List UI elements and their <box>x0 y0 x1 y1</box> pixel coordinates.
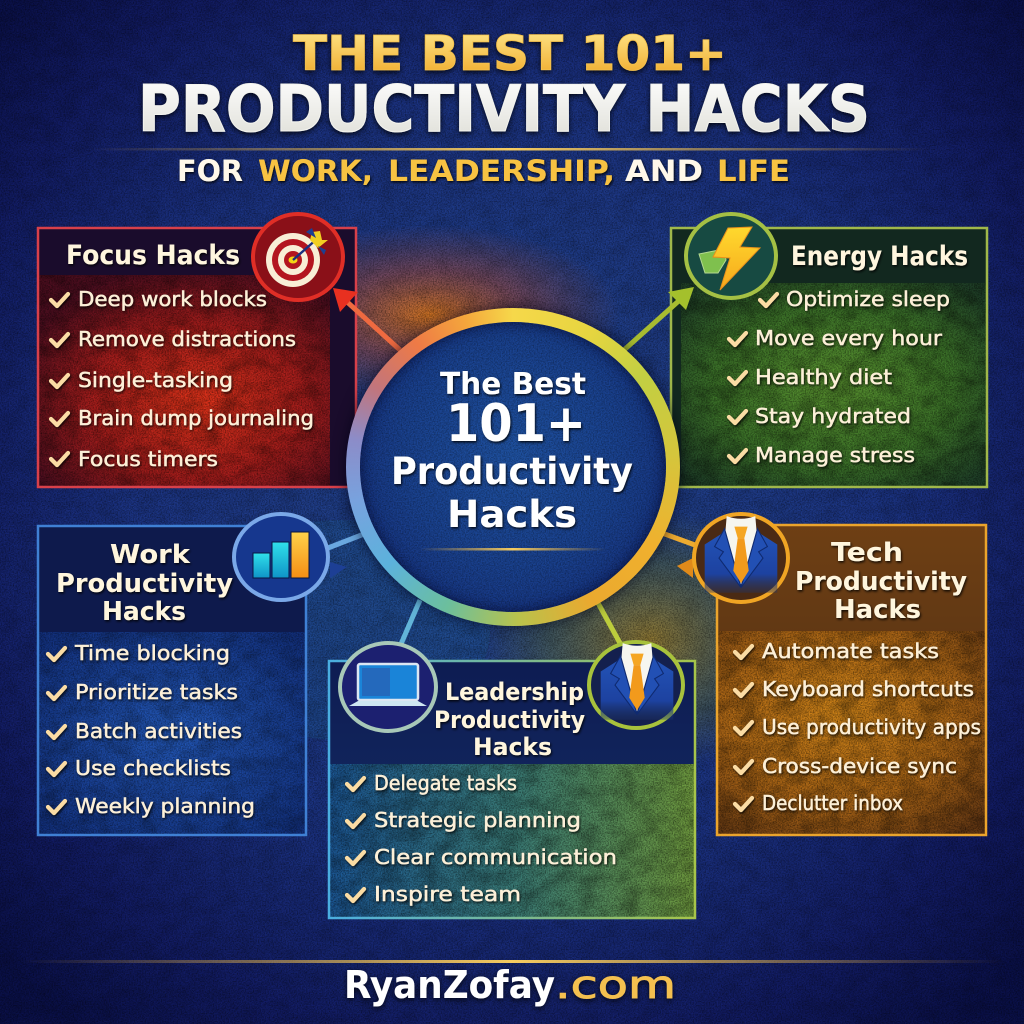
checklist: work: Weekly planning <box>75 794 255 818</box>
checklist: focus: Focus timers <box>78 447 218 471</box>
hub text <box>360 322 666 612</box>
heading: tech productivity hacks: Productivity <box>795 567 967 597</box>
footer url: .com <box>555 963 676 1007</box>
title line 1: THE BEST 101+ <box>293 26 727 82</box>
checklist: tech <box>735 639 981 815</box>
checklist: tech: Declutter inbox <box>762 791 903 815</box>
checklist: focus: Brain dump journaling <box>78 406 314 430</box>
checklist: energy: Healthy diet <box>755 365 892 389</box>
footer <box>20 960 1004 1007</box>
checklist: tech: Automate tasks <box>762 639 939 663</box>
heading: work productivity hacks: Hacks <box>102 597 186 627</box>
checklist: work: Batch activities <box>75 719 242 743</box>
checklist: energy: Optimize sleep <box>786 287 950 311</box>
connector: hub to leadership right <box>598 603 621 645</box>
heading: leadership productivity hacks <box>434 678 585 761</box>
checklist: work: Time blocking <box>74 641 230 665</box>
connector: hub to tech <box>662 533 695 578</box>
checklist: work: Use checklists <box>75 756 231 780</box>
panel: leadership productivity hacks <box>329 661 695 918</box>
arrow: hub to focus <box>333 288 400 350</box>
checklist: focus: Deep work blocks <box>78 287 267 311</box>
panel: work productivity hacks <box>38 526 306 835</box>
footer url: RyanZofay <box>344 963 555 1007</box>
title line 2: PRODUCTIVITY HACKS <box>138 73 870 147</box>
icon: laptop <box>340 643 436 731</box>
heading: leadership productivity hacks: Hacks <box>473 733 552 761</box>
subtitle: FOR <box>177 154 243 188</box>
hub text: Productivity <box>391 450 633 493</box>
title <box>90 26 930 188</box>
heading: work productivity hacks: Productivity <box>56 569 233 599</box>
icon: energy bolt <box>686 214 776 298</box>
checklist: work <box>48 641 255 818</box>
checklist: focus: Single-tasking <box>78 368 233 392</box>
icon: suit (leadership) <box>589 642 683 728</box>
checklist: focus <box>51 287 314 471</box>
heading: tech productivity hacks: Hacks <box>834 595 921 625</box>
subtitle: LEADERSHIP, <box>388 154 615 188</box>
heading: leadership productivity hacks: Leadership <box>445 678 584 706</box>
checklist: leadership: Delegate tasks <box>374 771 517 795</box>
subtitle: AND <box>625 154 703 188</box>
heading: tech productivity hacks: Tech <box>831 538 903 568</box>
checklist: focus: Remove distractions <box>78 327 296 351</box>
checklist: energy: Move every hour <box>755 326 943 350</box>
hub text: The Best <box>440 367 586 402</box>
heading: tech productivity hacks <box>795 538 967 625</box>
connector: hub to work <box>328 534 364 578</box>
heading: energy hacks: Energy Hacks <box>791 241 968 272</box>
panel: energy hacks <box>671 228 987 487</box>
panel: tech productivity hacks <box>717 525 986 835</box>
checklist: tech: Cross-device sync <box>762 754 957 778</box>
center hub <box>346 308 680 626</box>
connector: hub to leadership left <box>401 600 420 644</box>
checklist: energy: Stay hydrated <box>755 404 911 428</box>
checklist: tech: Use productivity apps <box>762 715 981 739</box>
checklist: energy: Manage stress <box>755 443 915 467</box>
subtitle: LIFE <box>717 154 790 188</box>
arrow: hub to energy <box>624 287 694 350</box>
panel: focus hacks <box>38 228 356 487</box>
checklist: energy <box>729 287 950 467</box>
footer url <box>344 963 676 1007</box>
checklist: leadership: Strategic planning <box>374 808 581 832</box>
hub text: Hacks <box>447 493 577 536</box>
checklist: leadership: Clear communication <box>374 845 617 869</box>
heading: work productivity hacks: Work <box>110 540 191 570</box>
subtitle: WORK, <box>258 154 373 188</box>
checklist: tech: Keyboard shortcuts <box>762 677 974 701</box>
checklist: leadership <box>347 771 617 906</box>
hub text: 101+ <box>446 394 586 454</box>
heading: focus hacks: Focus Hacks <box>66 240 240 271</box>
subtitle <box>177 154 790 188</box>
icon: suit (tech) <box>694 514 788 602</box>
checklist: leadership: Inspire team <box>374 882 521 906</box>
icon: bar chart <box>234 514 328 600</box>
checklist: work: Prioritize tasks <box>75 680 238 704</box>
heading: work productivity hacks <box>56 540 233 627</box>
heading: leadership productivity hacks: Productivity <box>434 706 585 734</box>
icon: target <box>253 214 343 300</box>
